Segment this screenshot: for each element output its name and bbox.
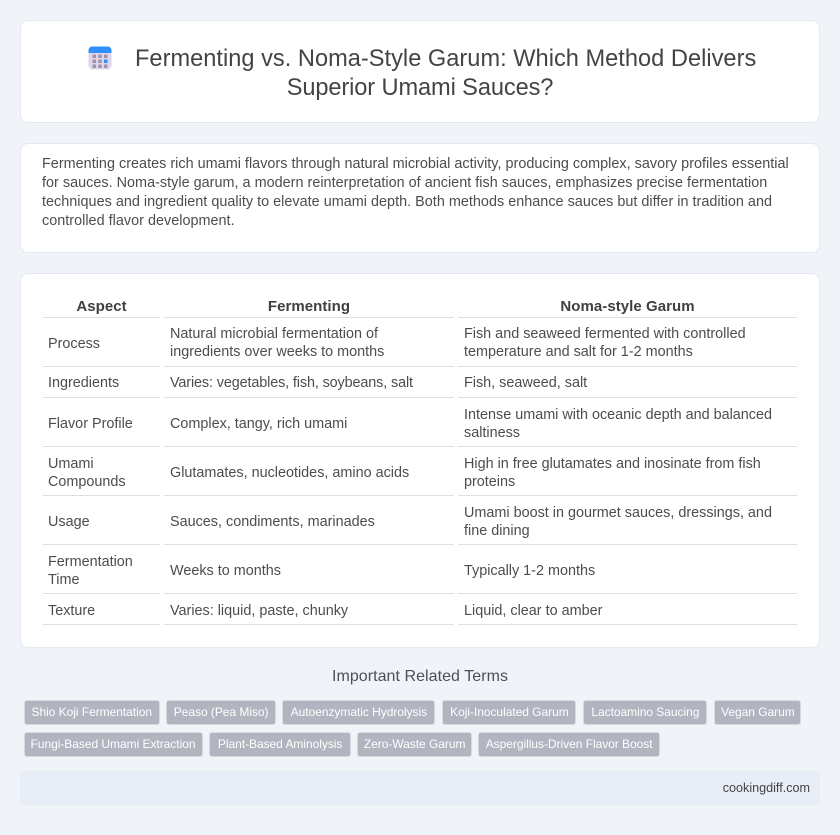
comparison table: Sauces, condiments, marinades	[170, 514, 375, 530]
comparison table: Umami boost in gourmet sauces, dressings, and	[464, 505, 772, 521]
comparison table: Glutamates, nucleotides, amino acids	[170, 465, 409, 481]
comparison table: Flavor Profile	[48, 416, 133, 432]
comparison table: Weeks to months	[170, 563, 281, 579]
row: umami compounds	[48, 456, 761, 490]
heading: related terms: Important Related Terms	[332, 668, 508, 685]
tag	[478, 732, 660, 757]
comparison table: Fermentation	[48, 554, 133, 570]
related term tags	[24, 700, 801, 757]
comparison table: ingredients over weeks to months	[170, 344, 384, 360]
tag	[714, 700, 801, 725]
tag: Aspergillus-Driven Flavor Boost	[486, 737, 653, 751]
comparison table: temperature and salt for 1-2 months	[464, 344, 693, 360]
footer source: cookingdiff.com	[723, 781, 810, 795]
row: flavor profile	[48, 407, 772, 441]
comparison table: Compounds	[48, 474, 126, 490]
comparison table: fine dining	[464, 523, 530, 539]
tag	[24, 732, 202, 757]
tag: Koji-Inoculated Garum	[450, 705, 569, 719]
tag: Plant-Based Aminolysis	[218, 737, 342, 751]
row: process	[48, 326, 746, 360]
row: usage	[48, 505, 772, 539]
tag	[209, 732, 351, 757]
tag: Fungi-Based Umami Extraction	[31, 737, 195, 751]
tag: Vegan Garum	[721, 705, 795, 719]
table header	[76, 298, 695, 315]
comparison table: Typically 1-2 months	[464, 563, 595, 579]
text block: description: for sauces. Noma-style garum, a modern reinterpretation of ancient fish sauces, emphasizes precise fermentation	[42, 175, 767, 191]
tag: Zero-Waste Garum	[364, 737, 465, 751]
comparison table: Process	[48, 336, 100, 352]
panel: comparison table	[20, 273, 820, 648]
tag: Peaso (Pea Miso)	[174, 705, 268, 719]
row: fermentation time	[48, 554, 595, 588]
text block: description: techniques and ingredient quality to elevate umami depth. Both methods enhance sauces but differ in tradition and	[42, 194, 772, 210]
comparison table: Usage	[48, 514, 90, 530]
text block: description: Fermenting creates rich umami flavors through natural microbial activity, producing complex, savory profiles essential	[42, 156, 789, 172]
tag: Autoenzymatic Hydrolysis	[291, 705, 427, 719]
footer band	[20, 771, 820, 805]
comparison table: Varies: liquid, paste, chunky	[170, 603, 348, 619]
table header: Fermenting	[268, 298, 350, 315]
comparison table: proteins	[464, 474, 515, 490]
tag	[166, 700, 276, 725]
title: Superior Umami Sauces?	[287, 75, 553, 101]
tag	[357, 732, 472, 757]
tag: Lactoamino Saucing	[591, 705, 699, 719]
tag	[442, 700, 576, 725]
table header: Aspect	[76, 298, 127, 315]
comparison table: Fish and seaweed fermented with controlled	[464, 326, 746, 342]
comparison table: High in free glutamates and inosinate from fish	[464, 456, 761, 472]
row: ingredients	[48, 375, 588, 391]
title	[135, 46, 756, 101]
comparison table: saltiness	[464, 425, 520, 441]
comparison table	[43, 298, 797, 625]
comparison table: Ingredients	[48, 375, 119, 391]
header panel	[20, 20, 820, 123]
comparison table: Varies: vegetables, fish, soybeans, salt	[170, 375, 413, 391]
comparison table: Intense umami with oceanic depth and balanced	[464, 407, 772, 423]
tag	[24, 700, 160, 725]
text block: description	[42, 156, 789, 229]
tag	[282, 700, 435, 725]
comparison table: Natural microbial fermentation of	[170, 326, 378, 342]
comparison table: Time	[48, 572, 79, 588]
icon: calendar	[88, 46, 112, 70]
row: texture	[48, 603, 602, 619]
comparison table: Complex, tangy, rich umami	[170, 416, 347, 432]
title: Fermenting vs. Noma-Style Garum: Which Method Delivers	[135, 46, 756, 72]
comparison table: Liquid, clear to amber	[464, 603, 602, 619]
table header: Noma-style Garum	[560, 298, 695, 315]
comparison table: Fish, seaweed, salt	[464, 375, 587, 391]
tag: Shio Koji Fermentation	[31, 705, 152, 719]
panel: description	[20, 143, 820, 253]
tag	[583, 700, 707, 725]
text block: description: controlled flavor development.	[42, 213, 235, 229]
comparison table: Umami	[48, 456, 94, 472]
comparison table: Texture	[48, 603, 95, 619]
